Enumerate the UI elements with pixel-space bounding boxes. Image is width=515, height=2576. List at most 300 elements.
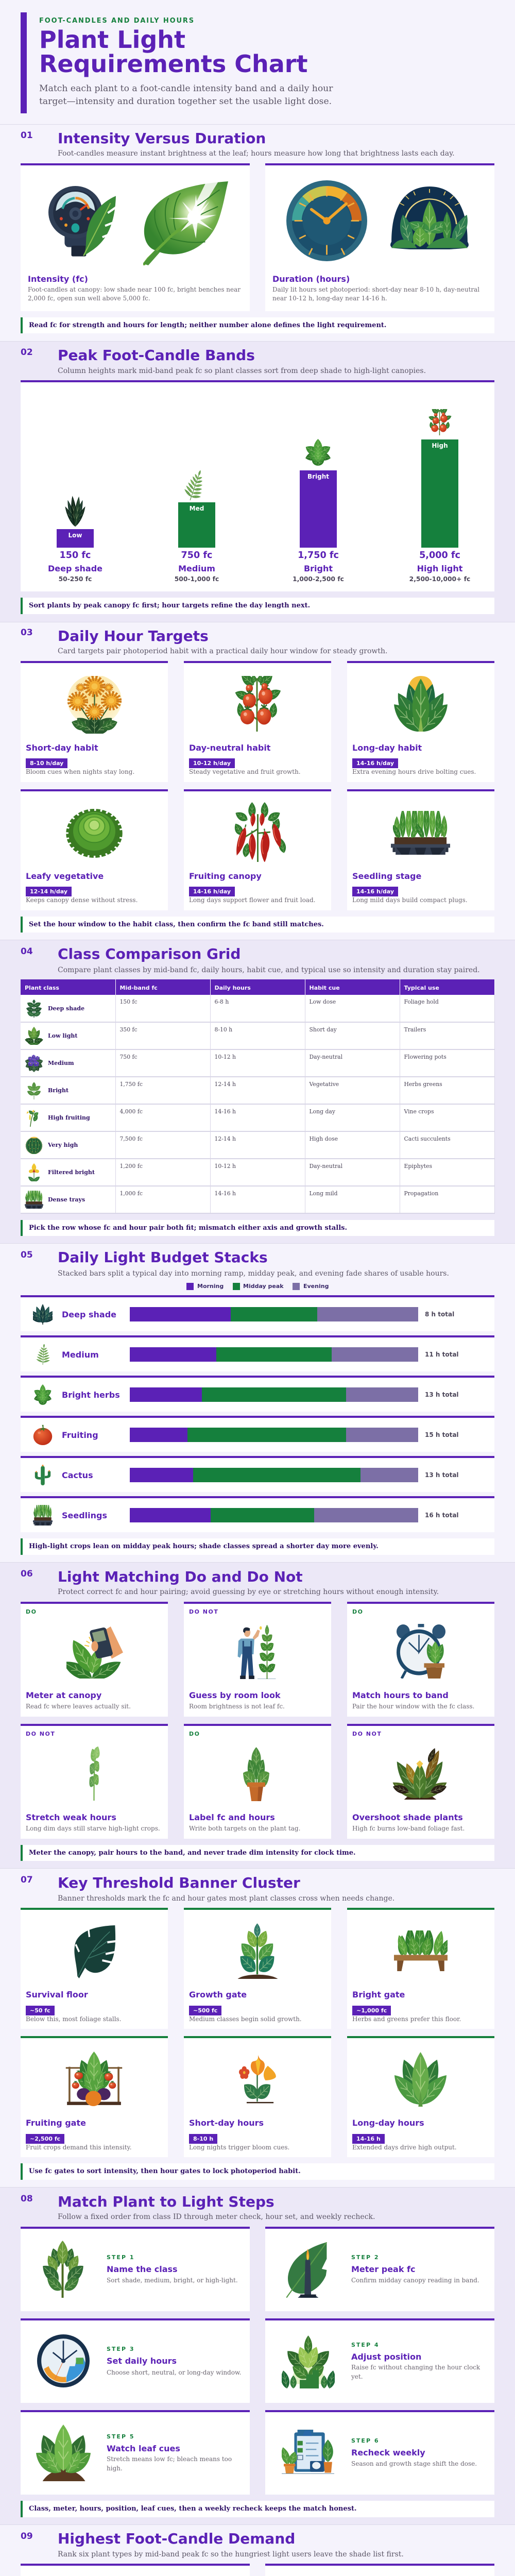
label: Deep shade [62,1310,116,1319]
comparison table: Medium [48,1060,74,1066]
icon: clock [37,2334,90,2387]
title: Match hours to band [352,1690,449,1700]
swatch midday [233,1283,240,1290]
threshold: 8-10 h [193,2136,213,2142]
number: 02 [21,347,33,358]
section 07 [0,1868,515,2187]
hours badge [189,887,235,896]
number: 07 [21,1875,33,1885]
text: Keeps canopy dense without stress. [26,896,138,904]
label: Bright herbs [62,1390,120,1400]
title: Survival floor [26,1990,88,1999]
icon: snake plant [65,496,85,527]
text: Pair the hour window with the fc class. [352,1703,474,1710]
threshold [189,2006,221,2015]
title: Seedling stage [352,871,421,881]
comparison table: Deep shade [48,1005,84,1012]
row: fruiting [21,1416,494,1452]
number: 09 [21,2531,33,2541]
comparison table: Foliage hold [404,998,439,1005]
label: high light: 2,500-10,000+ fc [409,575,470,583]
text: Herbs and greens prefer this floor. [352,2015,461,2023]
card text [28,286,241,302]
heading: Daily Hour Targets [58,628,209,645]
takeaway [21,317,494,333]
title: Day-neutral habit [189,743,270,753]
label: Seedlings [62,1511,107,1520]
step 4 [265,2318,494,2403]
comparison table: 8-10 h [214,1026,232,1033]
comparison table: Cacti succulents [404,1136,451,1142]
number: 04 [21,946,33,957]
card: do label [184,1724,331,1839]
banner: bright gate [347,1908,494,2029]
comparison table: 7,500 fc [119,1136,143,1142]
step 3 [21,2318,250,2403]
text: Write both targets on the plant tag. [189,1825,300,1832]
heading: Light Matching Do and Do Not [58,1568,303,1585]
card: long-day [347,661,494,782]
step 1 [21,2227,250,2311]
icon: alarm clock and pot [397,1624,445,1679]
text [107,2455,232,2473]
banner: short-day hours [184,2036,331,2157]
icon: lettuce [66,809,123,858]
step 2 [265,2227,494,2311]
card title: Intensity (fc) [28,274,88,284]
intro text: target—intensity and duration together set the usable light dose. [39,96,332,107]
text: Extended days drive high output. [352,2144,457,2151]
step label: STEP 3 [107,2346,135,2352]
hours badge [352,887,398,896]
title: Fruiting gate [26,2118,86,2128]
text: Below this, most foliage stalls. [26,2015,122,2023]
threshold [26,2134,64,2144]
text: Long days support flower and fruit load. [189,896,315,904]
panel: intensity [21,163,250,311]
label: high light: High light [417,564,462,573]
title: Requirements Chart [39,50,307,78]
icon: plants under light arc [390,187,469,249]
row: cactus [21,1456,494,1492]
stacked bar [130,1428,418,1442]
icon: spinach [393,2052,448,2107]
icon: leafy plant [38,2241,89,2298]
icon: clock dial [286,180,367,261]
title: Adjust position [351,2352,421,2362]
comparison table: Vegetative [309,1081,339,1088]
title: Meter peak fc [351,2264,415,2274]
number: 05 [21,1250,33,1260]
banner: fruiting gate [21,2036,168,2157]
title: Recheck weekly [351,2448,425,2458]
eyebrow: FOOT-CANDLES AND DAILY HOURS [39,17,195,25]
hours badge [352,758,398,768]
comparison table: High fruiting [48,1114,90,1121]
icon: glowing leaf [143,181,228,265]
comparison table: Very high [48,1142,78,1148]
hours badge: 8-10 h/day [30,760,63,767]
comparison table: Flowering pots [404,1054,447,1060]
legend [186,1283,329,1290]
heading: Match Plant to Light Steps [58,2193,274,2210]
comparison table: Long day [309,1108,335,1115]
panel: duration [265,163,494,311]
icon: potted plant [243,1747,269,1801]
icon [33,1304,53,1325]
takeaway: Class, meter, hours, position, leaf cues, then a weekly recheck keeps the match honest. [29,2505,356,2513]
icon [33,1425,53,1445]
stacked bar [130,1468,418,1482]
row: bright herbs [21,1376,494,1412]
tag: DO [26,1608,37,1615]
banner: growth gate [184,1908,331,2029]
heading: Highest Foot-Candle Demand [58,2530,295,2547]
takeaway [21,2163,494,2180]
text: Long mild days build compact plugs. [352,896,468,904]
text: Long nights trigger bloom cues. [189,2144,289,2151]
number: 06 [21,1569,33,1579]
takeaway: High-light crops lean on midday peak hours; shade classes spread a shorter day more evenly. [29,1543,379,1550]
label: high light [409,550,470,583]
title: Guess by room look [189,1690,281,1700]
hours badge: 14-16 h/day [193,888,231,895]
label: Medium [62,1350,99,1360]
label: deep shade: 150 fc [60,550,91,561]
text [351,2363,480,2381]
title: Plant Light [39,26,185,54]
text: Stretch means low fc; bleach means too [107,2455,232,2463]
threshold [26,2006,55,2015]
rank 1 [21,2564,250,2576]
threshold: ~50 fc [30,2007,50,2014]
comparison table: Vine crops [404,1108,434,1115]
row: medium [21,1335,494,1371]
text: Confirm midday canopy reading in band. [351,2277,479,2284]
label: bright: 1,750 fc [298,550,339,561]
text: Steady vegetative and fruit growth. [189,768,301,775]
label: Fruiting [62,1430,98,1440]
comparison table: Mid-band fc [119,985,158,991]
threshold: 14-16 h [356,2136,381,2142]
bar: low [57,529,94,548]
comparison table: Day-neutral [309,1163,342,1170]
rank 2 [265,2564,494,2576]
section 08 [0,2187,515,2524]
takeaway: Read fc for strength and hours for length; neither number alone defines the light requirement. [29,321,386,329]
comparison table: Daily hours [214,985,251,991]
legend: Midday peak [243,1283,284,1290]
text: Read fc where leaves actually sit. [26,1703,131,1710]
header [0,0,515,124]
intro text: Match each plant to a foot-candle intensity band and a daily hour [39,83,333,94]
card text: Daily lit hours set photoperiod: short-day near 8-10 h, day-neutral [272,286,479,293]
icon: handheld meter at plant [66,1626,123,1679]
takeaway: Set the hour window to the habit class, then confirm the fc band still matches. [29,921,324,928]
tag: DO NOT [352,1731,382,1737]
row: deep shade [21,1295,494,1331]
title: Meter at canopy [26,1690,101,1700]
threshold: ~1,000 fc [356,2007,387,2014]
comparison table: 4,000 fc [119,1108,143,1115]
hours badge [26,887,72,896]
icon: flowers [237,2055,278,2104]
comparison table: Propagation [404,1190,438,1197]
swatch morning [186,1283,194,1290]
icon: chrysanthemums [67,676,122,734]
bar: high [421,439,458,548]
stacked bar [130,1387,418,1402]
swatch evening [293,1283,300,1290]
hours badge: 12-14 h/day [30,888,67,895]
label: bright [293,550,344,583]
comparison table: Filtered bright [48,1169,95,1176]
title: Short-day hours [189,2118,264,2128]
threshold: ~2,500 fc [30,2136,60,2142]
comparison table: 750 fc [119,1054,138,1060]
comparison table: 6-8 h [214,998,229,1005]
hours badge [26,758,67,768]
takeaway [21,1220,494,1236]
card: do not stretch [21,1724,168,1839]
text: Choose short, neutral, or long-day window. [107,2369,242,2376]
comparison table: 10-12 h [214,1054,236,1060]
total: 13 h total [425,1391,459,1398]
heading: Peak Foot-Candle Bands [58,347,255,364]
icon: fruit frame [63,2052,125,2106]
tag: DO NOT [26,1731,55,1737]
section 01 [0,124,515,341]
bar: bright [300,470,337,548]
text: High fc burns low-band foliage fast. [352,1825,465,1832]
takeaway: Meter the canopy, pair hours to the band, and never trade dim intensity for clock time. [29,1849,356,1857]
comparison table: Long mild [309,1190,338,1197]
label: bright: Bright [304,564,333,573]
takeaway: Pick the row whose fc and hour pair both fit; mismatch either axis and growth stalls. [29,1224,347,1232]
text: Fruit crops demand this intensity. [26,2144,132,2151]
comparison table: 14-16 h [214,1190,236,1197]
title: Short-day habit [26,743,98,753]
icon: plant on steps [282,2334,335,2388]
takeaway [21,598,494,614]
heading: Intensity Versus Duration [58,130,266,147]
hours badge [189,758,235,768]
icon: clipboard and plants [282,2430,334,2475]
comparison table: Short day [309,1026,337,1033]
comparison table: Bright [48,1087,68,1094]
card: do meter [21,1602,168,1717]
comparison table: High dose [309,1136,338,1142]
icon: herb bench [394,1930,448,1971]
text: Extra evening hours drive bolting cues. [352,768,476,775]
number: 03 [21,628,33,638]
icon [36,1344,50,1365]
comparison table: Plant class [25,985,59,991]
card: seedling stage [347,789,494,910]
comparison table: 14-16 h [214,1108,236,1115]
step 5 [21,2410,250,2495]
card text: 2,000 fc, open sun well above 5,000 fc. [28,295,150,302]
comparison table: Low dose [309,998,336,1005]
comparison table: Trailers [404,1026,426,1033]
label: deep shade: Deep shade [48,564,102,573]
title: Watch leaf cues [107,2444,180,2453]
comparison table: 1,000 fc [119,1190,143,1197]
comparison table [21,979,494,1214]
stacked bar [130,1307,418,1321]
title: Fruiting canopy [189,871,262,881]
card: day-neutral [184,661,331,782]
comparison table: Low light [48,1032,77,1039]
icon: fern [184,470,202,500]
section 04 [0,940,515,1243]
icon: leggy sprout [89,1747,100,1801]
threshold [352,2134,385,2144]
icon: leaf and lamp [286,2242,328,2298]
row: seedlings [21,1496,494,1532]
label: bright: 1,000-2,500 fc [293,575,344,583]
label: deep shade: 50-250 fc [59,575,92,583]
step label: STEP 1 [107,2254,135,2261]
subheading: Compare plant classes by mid-band fc, daily hours, habit cue, and typical use so intensity and duration stay paired. [58,966,480,974]
comparison table: Epiphytes [404,1163,432,1170]
comparison table: 12-14 h [214,1136,236,1142]
heading: Key Threshold Banner Cluster [58,1874,300,1891]
label: medium [175,550,219,583]
total: 13 h total [425,1471,459,1479]
title [39,26,307,78]
card: leafy vegetative [21,789,168,910]
comparison table: 350 fc [119,1026,138,1033]
title: Stretch weak hours [26,1812,116,1822]
number: 08 [21,2194,33,2204]
stacked bar [130,1347,418,1362]
icon: plant in soil [35,2425,92,2481]
card text: Foot-candles at canopy: low shade near 100 fc, bright benches near [28,286,241,293]
bar: med: Med [190,505,204,512]
text: yet. [351,2373,363,2380]
subheading: Banner thresholds mark the fc and hour gates most plant classes cross when needs change. [58,1894,394,1903]
label: Cactus [62,1470,93,1480]
bar: high: High [432,442,448,449]
section 06 [0,1562,515,1868]
comparison table: 1,200 fc [119,1163,143,1170]
subheading: Protect correct fc and hour pairing; avoid guessing by eye or stretching hours without enough intensity. [58,1588,439,1596]
icon: young plant [233,1922,282,1979]
icon: spinach [394,676,448,732]
text: high. [107,2465,123,2472]
icon: seedling tray [391,811,450,855]
title: Overshoot shade plants [352,1812,463,1822]
total: 15 h total [425,1431,459,1438]
card: fruiting canopy [184,789,331,910]
comparison table: Dense trays [48,1196,85,1203]
icon: chili peppers [235,802,286,862]
text: Room brightness is not leaf fc. [189,1703,285,1710]
bar: low: Low [68,532,82,539]
title: Bright gate [352,1990,405,1999]
label: medium: 750 fc [181,550,212,561]
takeaway [21,2501,494,2517]
bar chart [21,380,494,591]
stacked bar [130,1508,418,1522]
icon: dark leaf [73,1925,116,1978]
card text: near 10-12 h, long-day near 14-16 h. [272,295,387,302]
card: short-day [21,661,168,782]
icon: tomato [428,409,451,435]
step 6 [265,2410,494,2495]
heading: Daily Light Budget Stacks [58,1249,268,1266]
icon: light meter with leaf [48,186,116,257]
subheading: Column heights mark mid-band peak fc so plant classes sort from deep shade to high-light canopies. [58,367,426,375]
total: 11 h total [425,1351,459,1358]
number: 01 [21,130,33,141]
text: Season and growth stage shift the dose. [351,2460,477,2467]
tag: DO NOT [189,1608,218,1615]
step label: STEP 2 [351,2254,379,2261]
legend: Morning [197,1283,224,1290]
title: Set daily hours [107,2356,177,2366]
title: Long-day habit [352,743,422,753]
title: Label fc and hours [189,1812,275,1822]
intro text [39,83,333,107]
hours badge: 14-16 h/day [356,760,394,767]
section 05 [0,1243,515,1562]
comparison table: Typical use [404,985,439,991]
subheading: Stacked bars split a typical day into morning ramp, midday peak, and evening fade shares of usable hours. [58,1269,449,1278]
title: Growth gate [189,1990,247,1999]
icon: basil [305,439,331,466]
step label: STEP 5 [107,2433,135,2440]
comparison table: Day-neutral [309,1054,342,1060]
label: deep shade [48,550,102,583]
icon: farmer and tall plant [238,1625,276,1679]
section 09 [0,2524,515,2576]
comparison table: Habit cue [309,985,340,991]
text: Medium classes begin solid growth. [189,2015,302,2023]
tag: DO [189,1731,200,1737]
takeaway: Sort plants by peak canopy fc first; hour targets refine the day length next. [29,602,310,609]
label: high light: 5,000 fc [419,550,460,561]
card: do not overshoot [347,1724,494,1839]
takeaway: Use fc gates to sort intensity, then hour gates to lock photoperiod habit. [29,2167,301,2175]
takeaway [21,1538,494,1555]
card: do not guess [184,1602,331,1717]
text: Long dim days still starve high-light crops. [26,1825,160,1832]
takeaway [21,1845,494,1861]
threshold [189,2134,217,2144]
comparison table: Herbs greens [404,1081,442,1088]
icon [35,1465,50,1485]
section 02 [0,341,515,622]
label: medium: Medium [178,564,215,573]
heading: Class Comparison Grid [58,945,241,962]
title: Name the class [107,2264,178,2274]
hours badge: 10-12 h/day [193,760,231,767]
title: Leafy vegetative [26,871,104,881]
step label: STEP 4 [351,2342,379,2348]
subheading: Foot-candles measure instant brightness at the leaf; hours measure how long that brightness lasts each day. [58,149,455,158]
accent bar [21,12,27,113]
bar: bright: Bright [307,473,329,480]
total: 16 h total [425,1512,459,1519]
bar: med [178,502,215,548]
section 03 [0,622,515,940]
banner: long-day hours [347,2036,494,2157]
tag: DO [352,1608,363,1615]
card title: Duration (hours) [272,274,350,284]
label: medium: 500-1,000 fc [175,575,219,583]
